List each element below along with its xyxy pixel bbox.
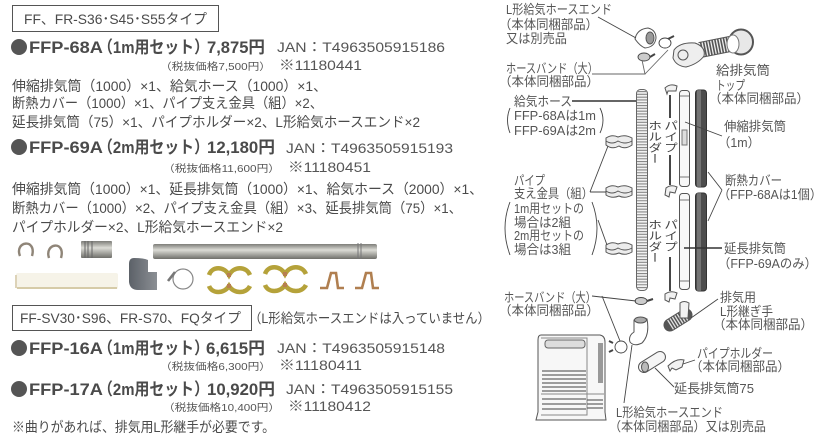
photo: kit parts — [16, 241, 379, 292]
icon: supply and exhaust top — [673, 30, 753, 67]
icon: extension exhaust tube — [680, 194, 690, 290]
order number FFP-17A: ※11180412 — [288, 398, 371, 414]
label: hose band lower — [499, 290, 599, 318]
label: pipe holder loose: （本体同梱部品） — [690, 359, 790, 374]
diagram: parts layout — [505, 17, 753, 420]
label: hose band top — [499, 61, 599, 89]
label: L-shaped hose end top: （本体同梱部品） — [499, 17, 598, 32]
order number FFP-69A: ※11180451 — [288, 159, 371, 175]
order number FFP-16A: ※11180411 — [279, 357, 362, 373]
product: FFP-68A price: （1m用セット） — [98, 38, 209, 57]
label: pipe support clamps: 2m用セットの — [514, 228, 584, 243]
icon: supply hose — [636, 90, 648, 290]
heading box: FF, FR-S36 S45 S55 type: FF、FR-S36･S45･S55タイプ — [24, 11, 207, 27]
label: hose band top: ホースバンド（大） — [506, 61, 598, 76]
label: extension exhaust tube: （FFP-69Aのみ） — [718, 256, 817, 271]
product: FFP-69A price: 12,180円 — [207, 138, 275, 157]
product: FFP-16A price: 6,615円 — [206, 339, 265, 358]
contents list FFP-69A: パイプホルダー×2、L形給気ホースエンド×2 — [12, 219, 283, 235]
icon: pipe holder top — [665, 85, 677, 185]
label: pipe holder upper, vertical: ホルダー — [646, 120, 662, 164]
label: pipe support clamps: 場合は3組 — [514, 242, 571, 257]
JAN code FFP-17A: JAN：T4963505915155 — [286, 381, 453, 397]
icon: insulation cover lower — [696, 193, 706, 291]
label: supply hose — [514, 94, 596, 138]
brackets — [505, 108, 603, 255]
label: hose band lower: （本体同梱部品） — [499, 303, 599, 318]
photo: long tube — [153, 243, 377, 259]
photo: pipe holders — [320, 273, 379, 288]
label: supply and exhaust top: 給排気筒 — [716, 63, 770, 78]
product: FFP-17A price: FFP-17A — [29, 380, 103, 399]
photo: gray elbow — [129, 258, 157, 290]
photo: double clamps — [209, 267, 306, 292]
label: pipe holder upper, vertical — [646, 120, 678, 164]
tax-excluded price FFP-16A: （税抜価格6,300円） — [160, 360, 271, 373]
label: L-shaped hose end top — [499, 2, 612, 46]
order number FFP-68A: ※11180441 — [279, 57, 362, 73]
photo: insulation cover — [16, 273, 118, 289]
product: FFP-68A price: FFP-68A — [29, 38, 103, 57]
label: pipe support clamps: パイプ — [514, 173, 545, 188]
label: insulation cover: 断熱カバー — [725, 173, 782, 188]
contents list FFP-69A: 断熱カバー（1000）×2、パイプ支え金具（組）×3、延長排気筒（75）×1、 — [12, 200, 462, 216]
icon: heater unit — [536, 335, 606, 420]
heading box: FF-SV30 S96 FR-S70 FQ type: FF-SV30･S96、FR-S70、FQタイプ — [20, 310, 241, 326]
note: hose end not included: （L形給気ホースエンドは入っていません） — [249, 311, 490, 326]
label: exhaust L joint: 排気用 — [720, 290, 756, 305]
icon: pipe clamps — [606, 136, 632, 254]
label: extension exhaust tube — [718, 241, 817, 271]
label: L-shaped hose end lower: （本体同梱部品）又は別売品 — [609, 419, 766, 434]
label: pipe holder lower, vertical: ホルダー — [646, 219, 662, 263]
label: exhaust L joint — [713, 290, 813, 332]
icon: telescopic exhaust tube — [680, 90, 690, 186]
icon: hose band, heater — [609, 341, 627, 353]
tax-excluded price FFP-69A: （税抜価格11,600円） — [163, 162, 280, 175]
label: supply hose: 給気ホース — [514, 94, 572, 109]
contents list FFP-69A: 伸縮排気筒（1000）×1、延長排気筒（1000）×1、給気ホース（2000）×1、 — [12, 181, 483, 197]
JAN code FFP-16A: JAN：T4963505915148 — [277, 340, 445, 356]
label: extension exhaust tube 75: 延長排気筒75 — [674, 381, 754, 396]
icon: L-shaped hose end, top — [635, 28, 656, 48]
label: pipe holder upper, vertical: パイプ — [662, 120, 678, 153]
product: FFP-69A price: FFP-69A — [29, 138, 103, 157]
contents list FFP-68A: 延長排気筒（75）×1、パイプホルダー×2、L形給気ホースエンド×2 — [12, 114, 420, 130]
panel: FF, FR-S36 type products — [11, 6, 483, 235]
label: L-shaped hose end top: 又は別売品 — [506, 31, 567, 46]
icon: exhaust L joint — [670, 302, 689, 325]
label: telescopic exhaust tube: （1m） — [718, 135, 760, 150]
photo: small clips — [19, 244, 62, 258]
label: pipe support clamps: 場合は2組 — [514, 215, 571, 230]
product: FFP-68A price — [11, 38, 265, 57]
photo: short tube — [81, 241, 112, 258]
product: FFP-16A price: （1m用セット） — [98, 339, 209, 358]
contents list FFP-68A: 伸縮排気筒（1000）×1、給気ホース（1000）×1、 — [12, 78, 327, 94]
label: supply and exhaust top — [709, 63, 809, 106]
icon: pipe holder bottom — [665, 257, 677, 302]
label: insulation cover — [718, 173, 822, 202]
heading box: FF-SV30 S96 FR-S70 FQ type — [12, 306, 252, 330]
photo: hose clamp — [168, 269, 193, 289]
product: FFP-69A price: （2m用セット） — [98, 138, 209, 157]
icon: hose band, middle — [638, 53, 655, 61]
product: FFP-69A price — [11, 138, 275, 157]
label: supply and exhaust top: （本体同梱部品） — [709, 91, 809, 106]
label: telescopic exhaust tube: 伸縮排気筒 — [724, 119, 786, 134]
JAN code FFP-69A: JAN：T4963505915193 — [286, 140, 453, 156]
icon: hose band, top — [659, 36, 674, 48]
panel: FF-SV30 type products — [11, 306, 490, 435]
label: pipe support clamps: 支え金具（組） — [514, 186, 593, 201]
icon: insulation cover upper — [696, 90, 706, 187]
icon: pipe holder middle — [665, 186, 677, 197]
leader lines — [572, 17, 722, 403]
label: supply hose: FFP-68Aは1m — [514, 108, 596, 123]
label: exhaust L joint: L形継ぎ手 — [720, 304, 773, 319]
footnote: ※曲りがあれば、排気用L形継手が必要です。 — [12, 419, 275, 435]
JAN code FFP-68A: JAN：T4963505915186 — [277, 39, 445, 55]
label: pipe support clamps — [514, 173, 593, 257]
icon: L-shaped hose end, lower — [630, 317, 648, 345]
label: L-shaped hose end top: L形給気ホースエンド — [506, 2, 612, 17]
label: hose band lower: ホースバンド（大） — [504, 290, 596, 305]
label: pipe holder loose: パイプホルダー — [697, 346, 773, 361]
label: pipe support clamps: 1m用セットの — [514, 201, 584, 216]
label: L-shaped hose end lower — [609, 405, 766, 434]
icon: hose band, lower — [635, 298, 653, 304]
tax-excluded price FFP-68A: （税抜価格7,500円） — [160, 60, 271, 73]
product: FFP-17A price — [11, 380, 275, 399]
label: pipe holder lower, vertical: パイプ — [662, 219, 678, 252]
labels: diagram callouts — [499, 2, 822, 434]
label: supply hose: FFP-69Aは2m — [514, 123, 596, 138]
product: FFP-17A price: 10,920円 — [207, 380, 275, 399]
label: telescopic exhaust tube — [718, 119, 786, 150]
label: supply and exhaust top: トップ — [716, 78, 745, 93]
label: hose band top: （本体同梱部品） — [499, 74, 599, 89]
label: exhaust L joint: （本体同梱部品） — [713, 317, 813, 332]
product: FFP-16A price — [11, 339, 265, 358]
product: FFP-16A price: FFP-16A — [29, 339, 103, 358]
icon: extension exhaust tube 75 — [642, 357, 660, 372]
label: L-shaped hose end lower: L形給気ホースエンド — [616, 405, 723, 420]
label: extension exhaust tube: 延長排気筒 — [724, 241, 786, 256]
contents list FFP-68A: 断熱カバー（1000）×1、パイプ支え金具（組）×2、 — [12, 95, 323, 111]
label: pipe holder lower, vertical — [646, 219, 678, 263]
icon: pipe holder, loose — [668, 360, 684, 371]
product: FFP-68A price: 7,875円 — [207, 38, 265, 57]
heading box: FF, FR-S36 S45 S55 type — [12, 6, 218, 32]
contents list FFP-68A — [12, 78, 420, 130]
product: FFP-17A price: （2m用セット） — [98, 380, 209, 399]
contents list FFP-69A — [12, 181, 483, 235]
tax-excluded price FFP-17A: （税抜価格10,400円） — [163, 401, 280, 414]
label: pipe holder loose — [690, 346, 790, 374]
